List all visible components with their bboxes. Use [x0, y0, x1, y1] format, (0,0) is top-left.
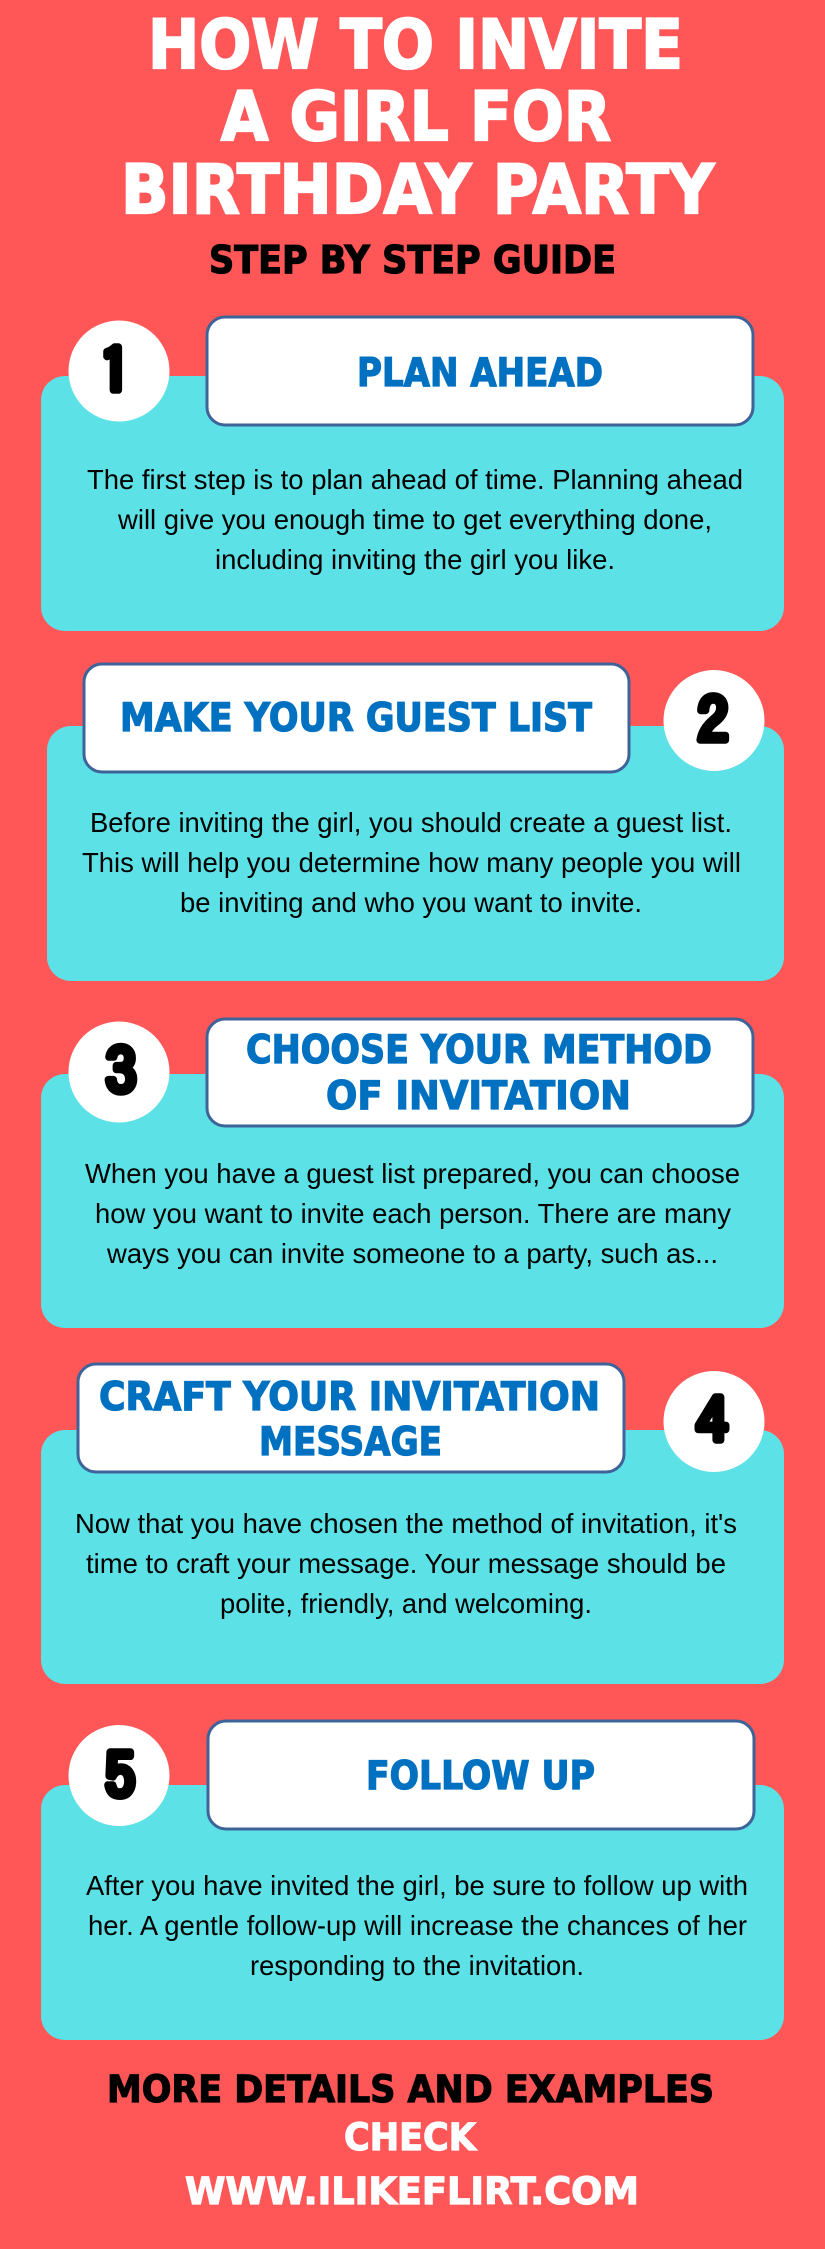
panel: step 1: [41, 317, 784, 631]
step 2 number badge: 2: [698, 690, 728, 751]
panel: step 5: [41, 1721, 784, 2040]
step 5 number badge: 5: [105, 1745, 135, 1806]
step 4 number badge: 4: [697, 1390, 727, 1451]
step 3 heading: [207, 1019, 753, 1126]
step 1 text: [87, 464, 743, 575]
panel: step 3: [41, 1019, 784, 1328]
step 4 text: [75, 1508, 737, 1619]
step 4 heading: CRAFT YOUR INVITATION: [99, 1375, 600, 1420]
step 2 text: This will help you determine how many people you will: [82, 847, 741, 878]
step 4 text: time to craft your message. Your message should be: [86, 1548, 726, 1579]
panel background 3: [41, 1074, 784, 1328]
panel: step 2: [47, 664, 784, 981]
panel background 2: [47, 726, 784, 981]
step 2 text: be inviting and who you want to invite.: [180, 887, 642, 918]
footer call to action: MORE DETAILS AND EXAMPLES: [107, 2068, 714, 2111]
step 2 heading: [84, 664, 629, 772]
step 5 text: After you have invited the girl, be sure to follow up with: [86, 1870, 748, 1901]
title: BIRTHDAY PARTY: [121, 151, 715, 230]
footer call to action: [107, 2068, 714, 2213]
step 2 heading: MAKE YOUR GUEST LIST: [120, 696, 592, 741]
step 3 text: ways you can invite someone to a party, such as...: [106, 1238, 718, 1269]
step 4 heading: [78, 1364, 624, 1472]
step 2 text: Before inviting the girl, you should create a guest list.: [90, 807, 732, 838]
step 1 text: will give you enough time to get everything done,: [117, 504, 712, 535]
step 5 text: her. A gentle follow-up will increase the chances of her: [88, 1910, 747, 1941]
title: A GIRL FOR: [221, 78, 611, 157]
step 3 text: When you have a guest list prepared, you can choose: [85, 1158, 740, 1189]
title: HOW TO INVITE: [148, 6, 683, 85]
panel background 4: [41, 1430, 784, 1684]
step 1 number badge: 1: [100, 340, 130, 401]
step 3 heading: OF INVITATION: [326, 1074, 631, 1119]
step 5 number badge: [68, 1725, 170, 1826]
step 1 heading: [207, 317, 753, 425]
step 3 text: how you want to invite each person. There are many: [95, 1198, 731, 1229]
panel background 5: [41, 1785, 784, 2040]
step 3 number badge: 3: [106, 1041, 136, 1102]
step 2 text: [82, 807, 741, 918]
panel: step 4: [41, 1364, 784, 1684]
step 5 text: responding to the invitation.: [250, 1950, 584, 1981]
step 1 text: The first step is to plan ahead of time. Planning ahead: [87, 464, 743, 495]
step 4 heading: MESSAGE: [259, 1420, 442, 1465]
step 5 text: [86, 1870, 748, 1981]
step 1 text: including inviting the girl you like.: [215, 544, 615, 575]
subtitle: STEP BY STEP GUIDE: [209, 238, 616, 282]
step 3 number badge: [68, 1022, 170, 1122]
title: [121, 6, 715, 230]
step 1 number badge: [68, 320, 170, 422]
step 3 text: [85, 1158, 740, 1269]
step 4 text: Now that you have chosen the method of invitation, it's: [75, 1508, 737, 1539]
step 3 heading: CHOOSE YOUR METHOD: [246, 1028, 712, 1073]
step 5 heading: FOLLOW UP: [366, 1754, 595, 1799]
footer call to action: WWW.ILIKEFLIRT.COM: [185, 2170, 639, 2213]
step 1 heading: PLAN AHEAD: [357, 351, 603, 396]
panel background 1: [41, 376, 784, 631]
step 2 number badge: [664, 670, 764, 771]
footer call to action: CHECK: [344, 2116, 477, 2159]
step 4 text: polite, friendly, and welcoming.: [220, 1588, 592, 1619]
step 5 heading: [208, 1721, 754, 1829]
step 4 number badge: [664, 1371, 764, 1472]
